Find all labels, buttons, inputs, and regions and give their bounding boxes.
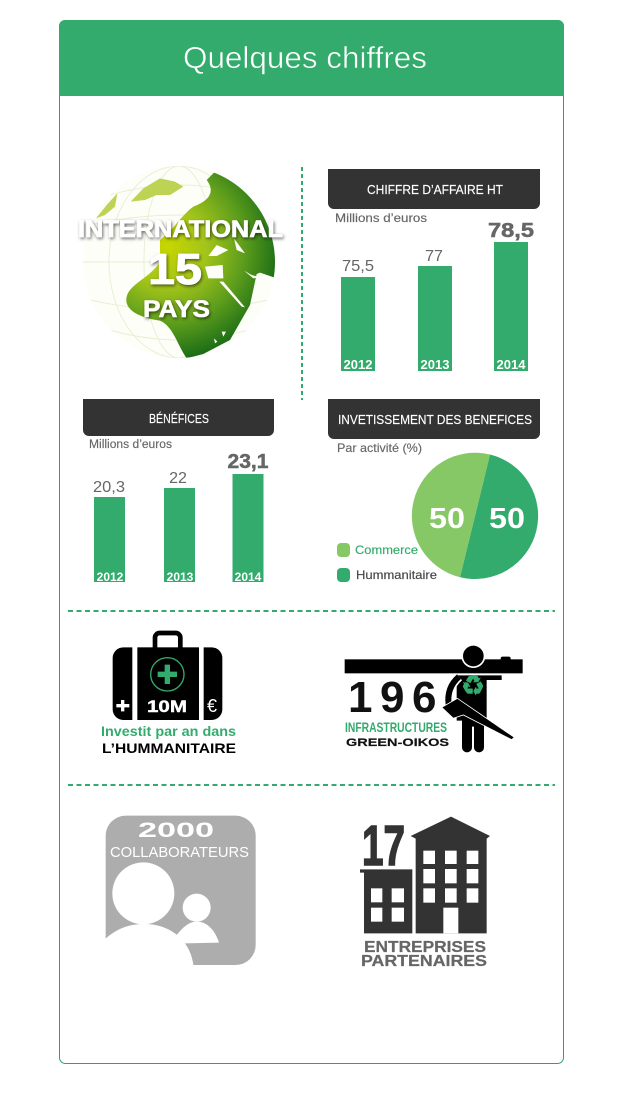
heading bar: INVETISSEMENT DES BENEFICES bbox=[338, 412, 532, 427]
title: Quelques chiffres bbox=[183, 40, 427, 75]
label: green-oikos: GREEN-OIKOS bbox=[346, 737, 449, 749]
bar chart: 2014 bbox=[497, 357, 526, 372]
label: pays: PAYS bbox=[143, 296, 210, 323]
unit label: Millions d’euros bbox=[89, 439, 172, 451]
panel: chiffre d'affaire bbox=[328, 169, 540, 372]
collaborators stat bbox=[103, 816, 256, 968]
label: l'humanitaire: L’HUMMANITAIRE bbox=[102, 740, 236, 756]
icon: buildings bbox=[360, 817, 490, 933]
infrastructures stat bbox=[345, 644, 523, 752]
header band bbox=[59, 20, 564, 96]
icon: worker carrying beam bbox=[345, 644, 523, 752]
label: infrastructures: INFRASTRUCTURES bbox=[345, 719, 447, 735]
label: entreprises: ENTREPRISES bbox=[364, 939, 486, 956]
number: 2000: 2000 bbox=[138, 819, 214, 842]
heading bar bbox=[83, 399, 274, 436]
pie chart: 50 bbox=[489, 503, 525, 535]
bar chart: 20,3 bbox=[93, 479, 125, 496]
number: 17: 17 bbox=[362, 814, 405, 878]
bar chart: 2012 bbox=[97, 570, 124, 584]
label: 15: 15 bbox=[148, 245, 202, 294]
legend: Commerce bbox=[355, 543, 418, 557]
bar chart: 77 bbox=[425, 248, 443, 265]
bar chart: 2012 bbox=[344, 357, 372, 372]
heading bar: BÉNÉFICES bbox=[149, 411, 209, 426]
partners stat bbox=[360, 814, 490, 970]
bar chart: 2014 bbox=[235, 570, 262, 584]
bar chart: 75,5 bbox=[342, 258, 374, 275]
humanitarian stat bbox=[101, 633, 236, 756]
heading bar: CHIFFRE D’AFFAIRE HT bbox=[367, 182, 503, 197]
bar chart: 78,5 bbox=[488, 220, 534, 242]
bar chart: 2013 bbox=[421, 357, 449, 372]
panel: investissement des bénéfices bbox=[328, 399, 540, 582]
label: international: INTERNATIONAL bbox=[78, 216, 283, 243]
pie chart bbox=[412, 453, 538, 579]
panel: bénéfices bbox=[83, 399, 274, 584]
panel: card outline bbox=[60, 20, 564, 1064]
heading bar bbox=[328, 399, 540, 439]
unit label: Par activité (%) bbox=[337, 441, 422, 455]
icon: people bbox=[103, 816, 256, 968]
icon: suitcase: € bbox=[207, 696, 217, 716]
pie chart: 50 bbox=[429, 503, 465, 535]
label: collaborateurs: COLLABORATEURS bbox=[110, 844, 249, 861]
bar chart: 2013 bbox=[167, 570, 194, 584]
legend: Hummanitaire bbox=[356, 568, 437, 582]
legend bbox=[337, 543, 437, 582]
heading bar bbox=[328, 169, 540, 209]
bar chart: 22 bbox=[169, 470, 187, 487]
bar chart bbox=[341, 220, 534, 372]
label: partenaires: PARTENAIRES bbox=[361, 953, 487, 970]
icon: worker carrying beam: ♻ bbox=[461, 671, 485, 702]
label: investit par an dans: Investit par an dans bbox=[101, 723, 236, 739]
number: 196: 196 bbox=[348, 673, 436, 722]
globe: international 15 pays bbox=[78, 166, 283, 358]
bar chart: 23,1 bbox=[228, 451, 268, 473]
bar chart bbox=[93, 451, 268, 584]
unit label: Millions d’euros bbox=[335, 211, 427, 225]
globe illustration bbox=[83, 166, 280, 358]
icon: suitcase bbox=[113, 633, 222, 720]
icon: suitcase: 10M bbox=[147, 697, 187, 716]
